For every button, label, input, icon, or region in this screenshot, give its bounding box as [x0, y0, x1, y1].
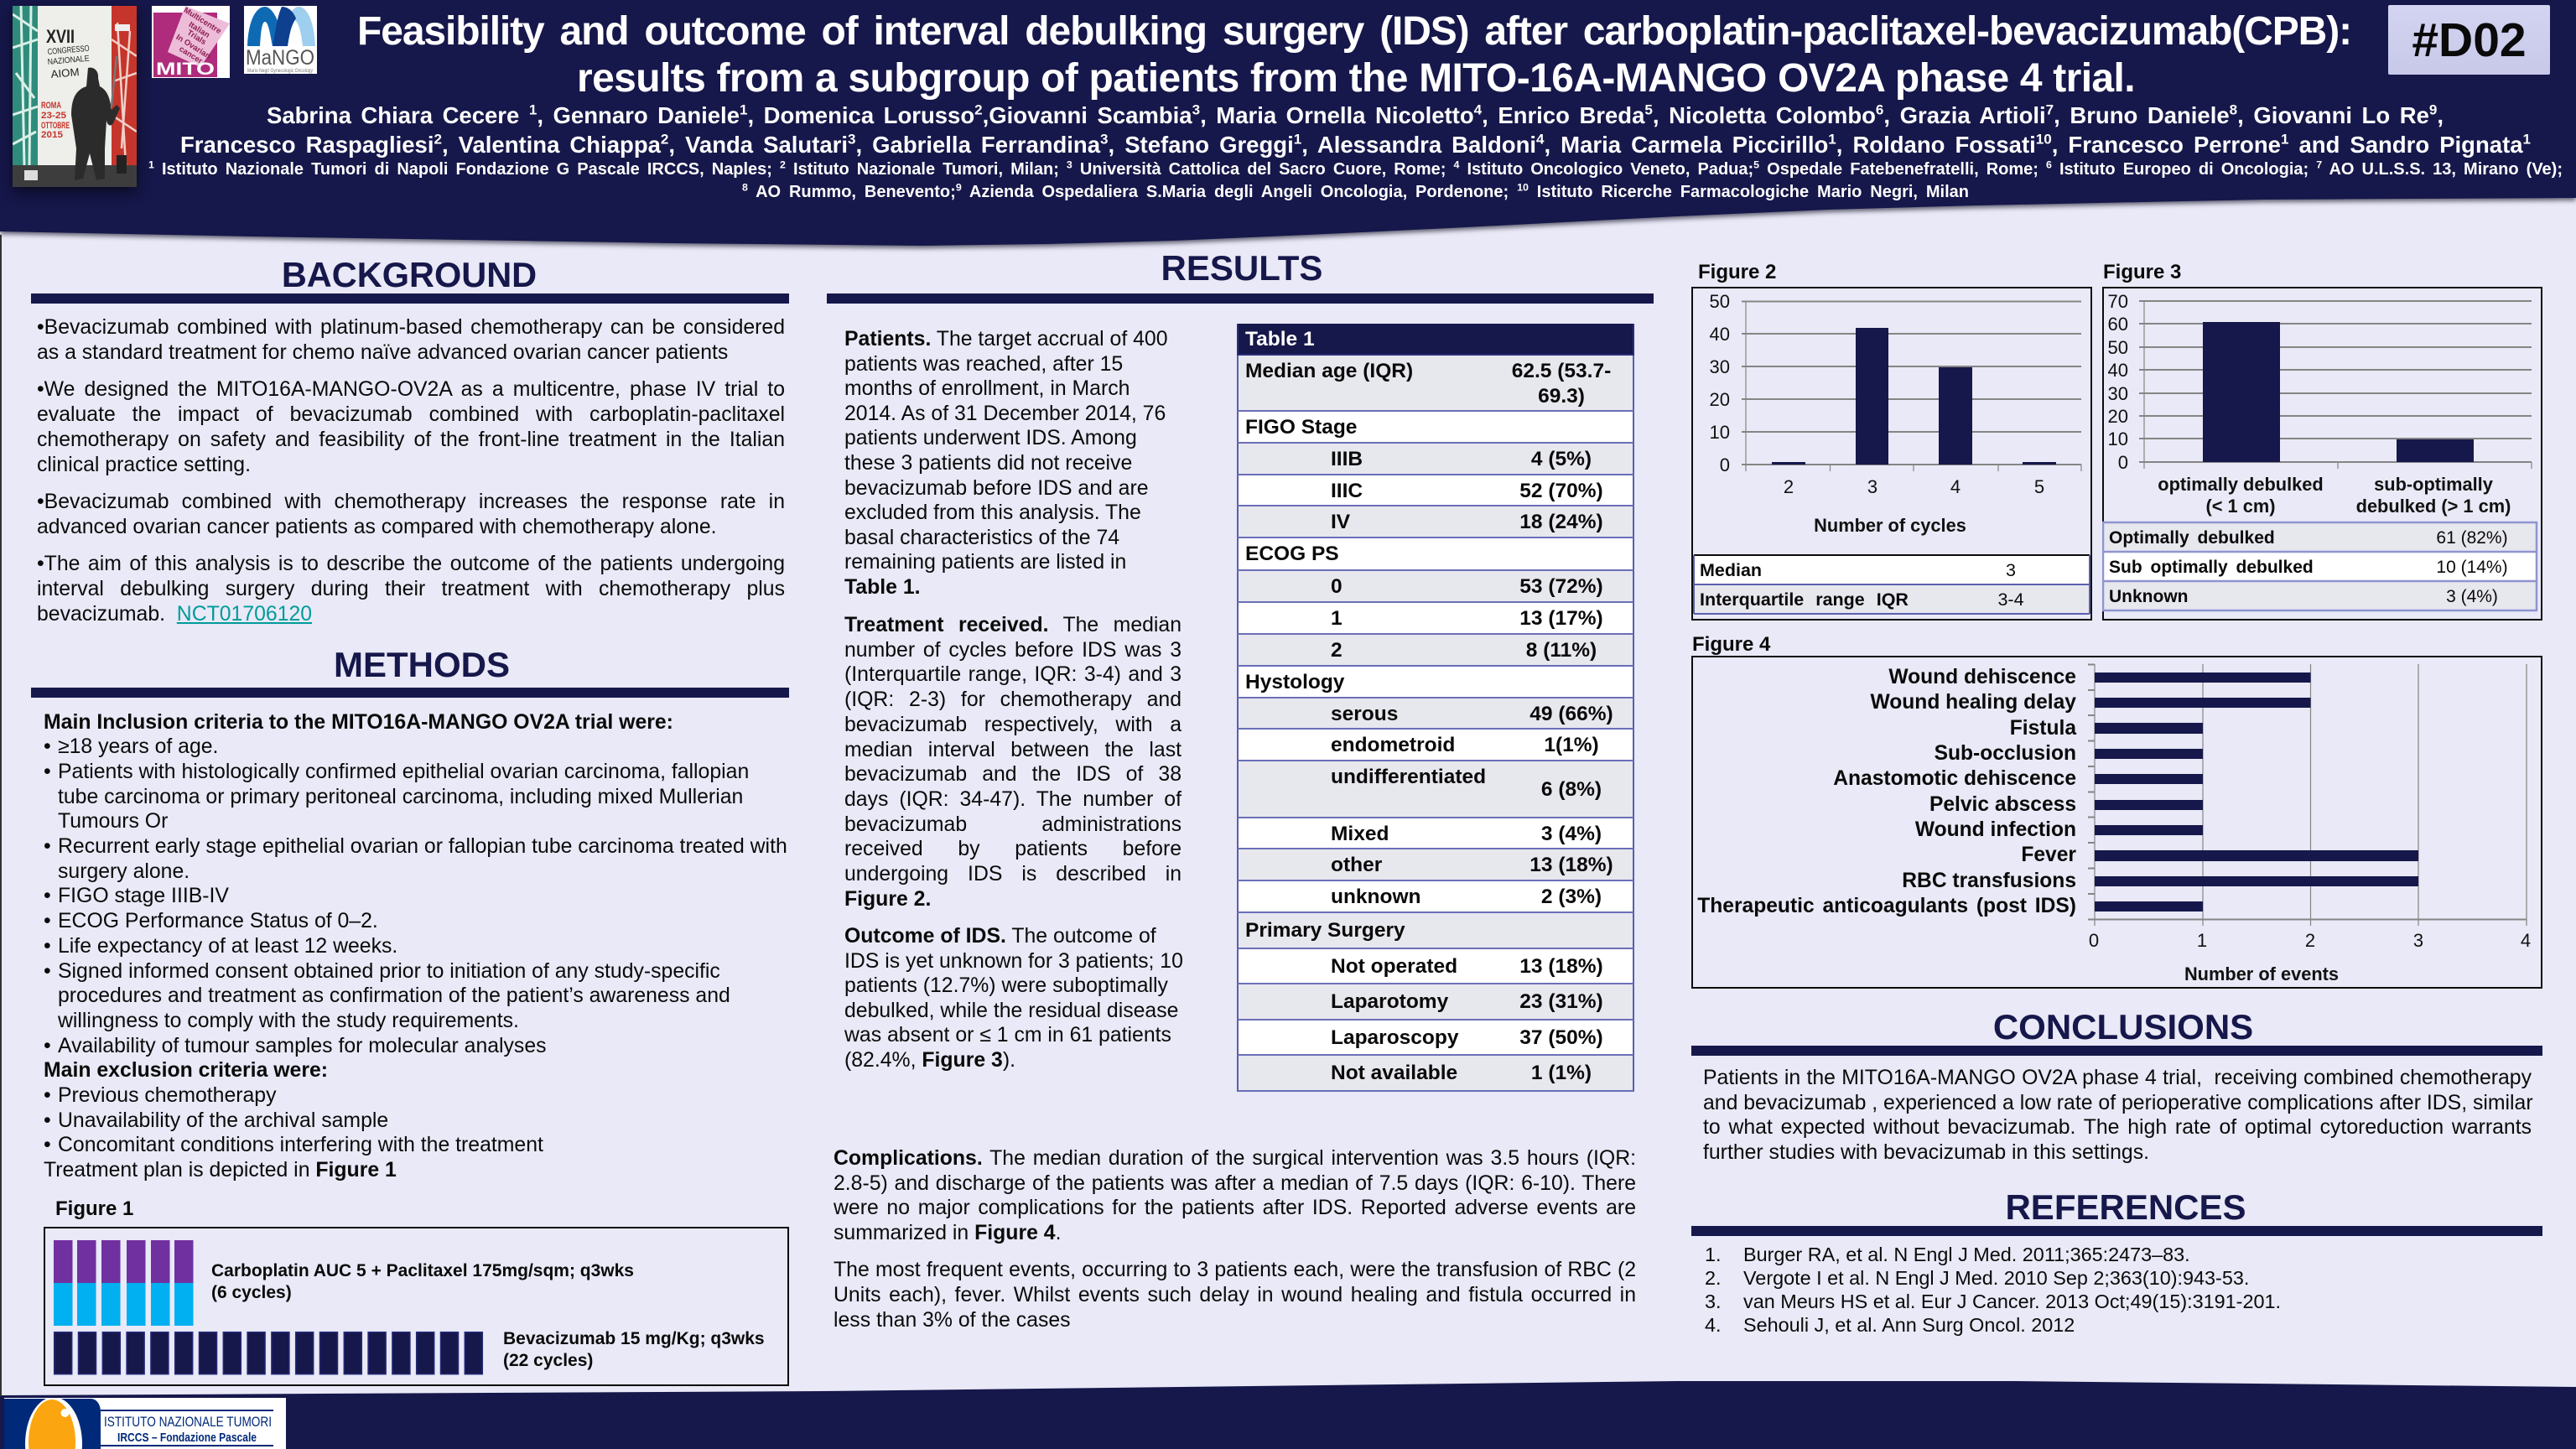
table 1: patient characteristics: 1(1%): [1544, 734, 1599, 756]
table 1: patient characteristics: Not operated: [1331, 955, 1457, 978]
text block: methods: •: [44, 1134, 51, 1156]
axis labels: 2: [1784, 476, 1794, 497]
logo: AIOM congress poster: 2015: [41, 130, 63, 140]
figure 4 label: Figure 4: [1692, 633, 1770, 656]
table 1: patient characteristics: ECOG PS: [1245, 543, 1339, 565]
text block: treatment received: days (IQR: 34-47). The number of: [844, 788, 1182, 811]
table 1: patient characteristics: Mixed: [1331, 823, 1389, 845]
summary table: 3 (4%): [2446, 587, 2498, 606]
logo: MITO: Italian: [187, 20, 211, 40]
panel: figure 3 debulking chart: optimally debulked: [2158, 474, 2324, 495]
title: Feasibility and outcome of interval debulking surgery (IDS) after carboplatin-paclitaxel-bevacizumab(CPB):: [357, 9, 2351, 54]
text block: treatment received: received by patients before: [844, 838, 1182, 860]
text block: methods: Unavailability of the archival sample: [58, 1109, 388, 1132]
text block: methods: Signed informed consent obtained prior to initiation of any study-specific: [58, 960, 720, 983]
text block: methods: Availability of tumour samples for molecular analyses: [58, 1035, 547, 1057]
text block: background: as a standard treatment for chemo naïve advanced ovarian cancer patients: [37, 341, 728, 364]
category labels: Sub-occlusion: [1935, 742, 2076, 765]
table 1: patient characteristics: 6 (8%): [1541, 778, 1602, 801]
treatment labels: (22 cycles): [503, 1351, 593, 1370]
text block: complications: Complications. The median duration of the surgical intervention was 3.5 hours (IQR:: [834, 1147, 1636, 1170]
heading: results: RESULTS: [1161, 248, 1322, 288]
poster number badge: [2388, 5, 2550, 75]
chemotherapy cycle bars: [54, 1240, 193, 1326]
table 1: patient characteristics: 8 (11%): [1526, 639, 1597, 662]
text block: background: [37, 316, 785, 626]
logo: AIOM congress poster: ROMA: [41, 101, 61, 111]
reference list: 4.: [1705, 1314, 1722, 1336]
figure 3 label: Figure 3: [2103, 261, 2181, 283]
treatment labels: (6 cycles): [211, 1283, 292, 1302]
summary table: Optimally debulked: [2109, 528, 2275, 548]
category labels: Wound infection: [1915, 818, 2076, 841]
text block: treatment received: bevacizumab administrations: [844, 813, 1182, 836]
text block: methods: •: [44, 885, 51, 907]
text block: outcome of IDS: patients (12.7%) were suboptimally: [844, 974, 1168, 997]
logo: Istituto Nazionale Tumori: IRCCS – Fondazione Pascale: [117, 1431, 257, 1445]
bars: [1772, 328, 2056, 465]
text block: methods: willingness to comply with the study requirements.: [58, 1010, 519, 1032]
authors: [180, 101, 2531, 158]
summary table: 3: [2006, 560, 2016, 580]
summary table: [2102, 522, 2537, 610]
table 1: patient characteristics: 13 (17%): [1519, 607, 1603, 630]
table 1: patient characteristics: 13 (18%): [1519, 955, 1603, 978]
table 1: patient characteristics: 69.3): [1538, 385, 1585, 408]
table 1: patient characteristics: 4 (5%): [1531, 448, 1592, 470]
treatment labels: Carboplatin AUC 5 + Paclitaxel 175mg/sqm; q3wks: [211, 1261, 634, 1280]
table 1: patient characteristics: other: [1331, 854, 1382, 876]
text block: conclusions: to what expected without bevacizumab. The high rate of optimal cytoreduction warrants: [1703, 1116, 2532, 1139]
text block: patients: months of enrollment, in March: [844, 377, 1130, 400]
axis labels: 60: [2108, 314, 2128, 335]
category labels: Pelvic abscess: [1929, 793, 2076, 816]
panel: figure 4 adverse events chart: [1691, 656, 2542, 989]
panel: figure 2 cycles chart: [1691, 287, 2092, 621]
table 1: patient characteristics: 1 (1%): [1531, 1062, 1592, 1084]
value axis: 4: [2521, 930, 2531, 951]
text block: methods: •: [44, 761, 51, 783]
text block: patients: Patients. The target accrual of 400: [844, 328, 1167, 351]
text block: methods: •: [44, 735, 51, 758]
table 1: patient characteristics: serous: [1331, 703, 1398, 725]
axis labels: 3: [1867, 476, 1877, 497]
category labels: Anastomotic dehiscence: [1833, 767, 2076, 790]
text block: complications: 2.8-5) and discharge of the patients was after a median of 7.5 days (IQR: 6-10). There: [834, 1172, 1636, 1195]
text block: background: •Bevacizumab combined with platinum-based chemotherapy can be considered: [37, 316, 785, 339]
figure 1 label: Figure 1: [55, 1197, 133, 1220]
axis labels: 10: [2108, 428, 2128, 449]
reference list: [1705, 1244, 2281, 1336]
category labels: Fever: [2021, 844, 2076, 866]
table 1: patient characteristics: 62.5 (53.7-: [1512, 360, 1611, 382]
text block: outcome of IDS: Outcome of IDS. The outcome of: [844, 925, 1156, 948]
panel: figure 3 debulking chart: (< 1 cm): [2206, 496, 2275, 517]
panel: figure 4 adverse events chart: Number of events: [2184, 963, 2339, 984]
text block: methods: Main Inclusion criteria to the MITO16A-MANGO OV2A trial were:: [44, 711, 673, 733]
text block: methods: ≥18 years of age.: [58, 735, 218, 758]
axis labels: 40: [2108, 360, 2128, 381]
affiliations: [148, 158, 2563, 201]
text block: treatment received: Figure 2.: [844, 888, 931, 911]
value axis: 1: [2197, 930, 2207, 951]
text block: outcome of IDS: (82.4%, Figure 3).: [844, 1049, 1015, 1072]
text block: complications: Units each), fever. Whilst events such delay in wound healing and fistula occurred in: [834, 1284, 1636, 1306]
text block: methods: •: [44, 935, 51, 958]
reference list: 1.: [1705, 1244, 1722, 1265]
value axis: 2: [2305, 930, 2315, 951]
text block: treatment received: bevacizumab and the IDS of 38: [844, 763, 1182, 786]
table 1: patient characteristics: Median age (IQR): [1245, 360, 1413, 382]
text block: patients: excluded from this analysis. The: [844, 501, 1141, 524]
axis labels: 40: [1710, 324, 1730, 345]
logo: AIOM congress poster: CONGRESSO: [47, 44, 90, 57]
axis labels: 0: [1720, 454, 1730, 475]
text block: background: •Bevacizumab combined with chemotherapy increases the response rate in: [37, 491, 785, 513]
logo: AIOM congress poster: [7, 5, 143, 198]
footer band: [0, 1381, 2576, 1449]
text block: treatment received: bevacizumab respectively, with a: [844, 714, 1182, 736]
table 1: patient characteristics: FIGO Stage: [1245, 416, 1357, 439]
axis labels: 20: [2108, 406, 2128, 427]
panel: figure 1 treatment schema: [44, 1227, 789, 1386]
text block: complications: The most frequent events, occurring to 3 patients each, were the transfusion of RBC (2: [834, 1259, 1636, 1281]
text block: methods: FIGO stage IIIB-IV: [58, 885, 229, 907]
text block: treatment received: (Interquartile range, IQR: 3-4) and 3: [844, 663, 1182, 686]
text block: methods: •: [44, 1109, 51, 1132]
table 1: patient characteristics: IIIC: [1331, 480, 1363, 502]
summary table: Unknown: [2109, 587, 2189, 606]
text block: patients: [844, 328, 1167, 599]
logo: MITO: [152, 6, 230, 78]
logo: AIOM congress poster: NAZIONALE: [47, 55, 90, 67]
table 1: patient characteristics: [1237, 324, 1634, 1092]
text block: background: advanced ovarian cancer patients as compared with chemotherapy alone.: [37, 516, 717, 538]
text block: patients: bevacizumab before IDS and are: [844, 477, 1149, 500]
logo: AIOM congress poster: XVII: [46, 26, 75, 47]
header band with curved lower edge: [0, 0, 2576, 252]
axis labels: [2108, 291, 2128, 473]
text block: methods: •: [44, 960, 51, 983]
poster number badge: #D02: [2412, 13, 2527, 67]
heading: background: BACKGROUND: [282, 255, 537, 294]
text block: outcome of IDS: IDS is yet unknown for 3 patients; 10: [844, 950, 1183, 973]
summary table: 61 (82%): [2436, 528, 2508, 548]
table 1: patient characteristics: Primary Surgery: [1245, 919, 1405, 942]
table 1: patient characteristics: IV: [1331, 511, 1350, 533]
text block: background: chemotherapy on safety and feasibility of the front-line treatment in the Italian: [37, 428, 785, 451]
text block: methods: procedures and treatment as confirmation of the patient’s awareness and: [58, 984, 730, 1007]
logo: MaNGO: [244, 6, 317, 74]
logo: AIOM congress poster: 23-25: [41, 111, 66, 121]
affiliations: 1 Istituto Nazionale Tumori di Napoli Fondazione G Pascale IRCCS, Naples; 2 Istituto Nazionale Tumori, Milan; 3 Università Cattolica del Sacro Cuore, Rome; 4 Istituto Oncologico Veneto, Padua;5 Ospedale Fatebenefratelli, Rome; 6 Istituto Europeo di Oncologia; 7 AO U.L.S.S. 13, Mirano (Ve);: [148, 158, 2563, 178]
figure 2 label: Figure 2: [1698, 261, 1776, 283]
logo: MITO: In Ovarian: [174, 33, 212, 61]
table 1: patient characteristics: unknown: [1331, 886, 1421, 908]
summary table: 10 (14%): [2436, 558, 2508, 577]
table 1: patient characteristics: Not available: [1331, 1062, 1457, 1084]
axis labels: 4: [1950, 476, 1961, 497]
summary table: Median: [1700, 560, 1762, 580]
table 1: patient characteristics: Laparoscopy: [1331, 1026, 1459, 1049]
table 1: patient characteristics: undifferentiated: [1331, 766, 1486, 788]
bevacizumab cycle bars: [55, 1332, 482, 1374]
treatment labels: Bevacizumab 15 mg/Kg; q3wks: [503, 1329, 765, 1348]
table 1: patient characteristics: 2 (3%): [1541, 886, 1602, 908]
text block: methods: surgery alone.: [58, 860, 190, 883]
logo: MITO: Multicentre: [182, 6, 223, 36]
text block: patients: 2014. As of 31 December 2014, 76: [844, 402, 1166, 425]
table 1: patient characteristics: 53 (72%): [1519, 575, 1603, 598]
text block: conclusions: further studies with bevacizumab in this settings.: [1703, 1141, 2149, 1164]
table 1: patient characteristics: 18 (24%): [1519, 511, 1603, 533]
text block: treatment received: number of cycles before IDS was 3: [844, 639, 1182, 662]
heading: methods: METHODS: [334, 645, 510, 684]
category labels: Wound dehiscence: [1888, 666, 2076, 688]
panel: figure 3 debulking chart: [2102, 287, 2542, 621]
axis labels: 0: [2118, 452, 2128, 473]
text block: background: evaluate the impact of bevacizumab combined with carboplatin-paclitaxel: [37, 403, 785, 426]
table 1: patient characteristics: 23 (31%): [1519, 990, 1603, 1013]
logo: MITO: cancer: [177, 44, 204, 66]
summary table: Sub optimally debulked: [2109, 558, 2314, 577]
text block: methods: [44, 711, 787, 1182]
axis labels: 10: [1710, 422, 1730, 443]
text block: methods: Previous chemotherapy: [58, 1084, 277, 1107]
text block: methods: •: [44, 1084, 51, 1107]
summary table: [1694, 555, 2090, 614]
text block: methods: •: [44, 1035, 51, 1057]
category labels: [1697, 666, 2076, 917]
table 1: patient characteristics: 3 (4%): [1541, 823, 1602, 845]
table 1: patient characteristics: Laparotomy: [1331, 990, 1448, 1013]
axis labels: 30: [2108, 383, 2128, 404]
title: [357, 9, 2351, 101]
text block: treatment received: [844, 614, 1182, 911]
axis labels: 30: [1710, 356, 1730, 377]
authors: Sabrina Chiara Cecere 1, Gennaro Daniele1, Domenica Lorusso2,Giovanni Scambia3, Maria Ornella Nicoletto4, Enrico Breda5, Nicoletta Colombo6, Grazia Artioli7, Bruno Daniele8, Giovanni Lo Re9,: [267, 101, 2444, 128]
table 1: patient characteristics: 0: [1331, 575, 1343, 598]
text block: treatment received: undergoing IDS is described in: [844, 863, 1182, 886]
category labels: Wound healing delay: [1870, 691, 2076, 714]
axis labels: 50: [2108, 337, 2128, 358]
reference list: 2.: [1705, 1267, 1722, 1289]
text block: outcome of IDS: was absent or ≤ 1 cm in 61 patients: [844, 1024, 1171, 1046]
logo: Istituto Nazionale Tumori: [4, 1398, 286, 1449]
text block: methods: Main exclusion criteria were:: [44, 1059, 328, 1082]
reference list: Burger RA, et al. N Engl J Med. 2011;365:2473–83.: [1743, 1244, 2190, 1265]
text block: conclusions: and bevacizumab , experienced a low rate of perioperative complications after IDS, similar: [1703, 1092, 2533, 1114]
reference list: Vergote I et al. N Engl J Med. 2010 Sep 2;363(10):943-53.: [1743, 1267, 2249, 1289]
text block: background: interval debulking surgery during their treatment with chemotherapy plus: [37, 578, 785, 600]
text block: methods: Treatment plan is depicted in Figure 1: [44, 1159, 397, 1182]
axis labels: 20: [1710, 389, 1730, 410]
text block: background: bevacizumab. NCT01706120: [37, 603, 312, 626]
axis labels: [1710, 291, 2044, 497]
logo: AIOM congress poster: OTTOBRE: [41, 121, 70, 131]
text block: treatment received: Treatment received. The median: [844, 614, 1182, 636]
text block: methods: ECOG Performance Status of 0–2.: [58, 910, 378, 932]
table 1: patient characteristics: endometroid: [1331, 734, 1455, 756]
text block: complications: were no major complications for the patients after IDS. Reported adverse events are: [834, 1197, 1636, 1219]
bars: [2095, 673, 2418, 911]
table 1: patient characteristics: 37 (50%): [1519, 1026, 1603, 1049]
table 1: patient characteristics: 52 (70%): [1519, 480, 1603, 502]
panel: figure 3 debulking chart: sub-optimally: [2374, 474, 2493, 495]
value axis: 3: [2413, 930, 2423, 951]
text block: patients: basal characteristics of the 74: [844, 527, 1119, 549]
text block: complications: less than 3% of the cases: [834, 1309, 1071, 1332]
table 1: patient characteristics: IIIB: [1331, 448, 1363, 470]
reference list: Sehouli J, et al. Ann Surg Oncol. 2012: [1743, 1314, 2075, 1336]
text block: methods: tube carcinoma or primary peritoneal carcinoma, including mixed Mullerian: [58, 786, 743, 808]
affiliations: 8 AO Rummo, Benevento;9 Azienda Ospedaliera S.Maria degli Angeli Oncologia, Pordenone; 10 Istituto Ricerche Farmacologiche Mario Negri, Milan: [742, 181, 1969, 201]
authors: Francesco Raspagliesi2, Valentina Chiappa2, Vanda Salutari3, Gabriella Ferrandina3, Stefano Greggi1, Alessandra Baldoni4, Maria Carmela Piccirillo1, Roldano Fossati10, Francesco Perrone1 and Sandro Pignata1: [180, 131, 2531, 158]
text block: outcome of IDS: debulked, while the residual disease: [844, 1000, 1178, 1022]
category labels: RBC transfusions: [1902, 870, 2076, 892]
text block: patients: Table 1.: [844, 576, 921, 599]
axis labels: 50: [1710, 291, 1730, 312]
heading: conclusions: CONCLUSIONS: [1993, 1007, 2253, 1046]
panel: figure 2 cycles chart: Number of cycles: [1814, 515, 1966, 536]
axis labels: 70: [2108, 291, 2128, 312]
text block: methods: Tumours Or: [58, 810, 168, 833]
summary table: 3-4: [1997, 589, 2024, 610]
category labels: Therapeutic anticoagulants (post IDS): [1697, 895, 2076, 917]
text block: methods: •: [44, 910, 51, 932]
axis labels: 5: [2034, 476, 2044, 497]
text block: patients: these 3 patients did not receive: [844, 452, 1132, 475]
text block: methods: Life expectancy of at least 12 weeks.: [58, 935, 397, 958]
text block: background: clinical practice setting.: [37, 454, 251, 476]
text block: patients: patients underwent IDS. Among: [844, 427, 1137, 449]
value axis: [2089, 930, 2531, 951]
text block: outcome of IDS: [844, 925, 1183, 1072]
table 1: patient characteristics: 1: [1331, 607, 1343, 630]
text block: complications: summarized in Figure 4.: [834, 1222, 1061, 1244]
table 1: patient characteristics: 49 (66%): [1530, 703, 1613, 725]
treatment labels: [211, 1261, 765, 1370]
heading: references: REFERENCES: [2005, 1187, 2246, 1227]
category labels: Fistula: [2010, 717, 2076, 740]
reference list: van Meurs HS et al. Eur J Cancer. 2013 Oct;49(15):3191-201.: [1743, 1291, 2281, 1312]
table 1: patient characteristics: Hystology: [1245, 671, 1344, 693]
summary table: Interquartile range IQR: [1700, 589, 1909, 610]
text block: complications: [834, 1147, 1636, 1332]
text block: treatment received: median interval between the last: [844, 739, 1182, 761]
value axis: 0: [2089, 930, 2099, 951]
logo: MITO: Trials: [185, 29, 208, 47]
text block: background: •We designed the MITO16A-MANGO-OV2A as a multicentre, phase IV trial to: [37, 378, 785, 401]
text block: methods: •: [44, 835, 51, 858]
text block: methods: Concomitant conditions interfering with the treatment: [58, 1134, 543, 1156]
text block: treatment received: (IQR: 2-3) for chemotherapy and: [844, 688, 1182, 711]
table 1: patient characteristics: 13 (18%): [1530, 854, 1613, 876]
bars: [2203, 322, 2474, 462]
text block: conclusions: Patients in the MITO16A-MANGO OV2A phase 4 trial, receiving combined chemotherapy: [1703, 1067, 2532, 1089]
panel: figure 3 debulking chart: debulked (> 1 cm): [2356, 496, 2511, 517]
title: results from a subgroup of patients from the MITO-16A-MANGO OV2A phase 4 trial.: [577, 56, 2135, 101]
text block: methods: Patients with histologically confirmed epithelial ovarian carcinoma, fallopian: [58, 761, 749, 783]
table 1: patient characteristics: 2: [1331, 639, 1343, 662]
text block: background: •The aim of this analysis is to describe the outcome of the patients undergoing: [37, 553, 785, 575]
logo: AIOM congress poster: AIOM: [50, 65, 80, 80]
text block: methods: Recurrent early stage epithelial ovarian or fallopian tube carcinoma treated with: [58, 835, 787, 858]
text block: patients: remaining patients are listed in: [844, 551, 1126, 574]
text block: conclusions: [1703, 1067, 2533, 1164]
reference list: 3.: [1705, 1291, 1722, 1312]
text block: patients: patients was reached, after 15: [844, 353, 1123, 376]
table 1: patient characteristics: Table 1: [1245, 328, 1315, 351]
